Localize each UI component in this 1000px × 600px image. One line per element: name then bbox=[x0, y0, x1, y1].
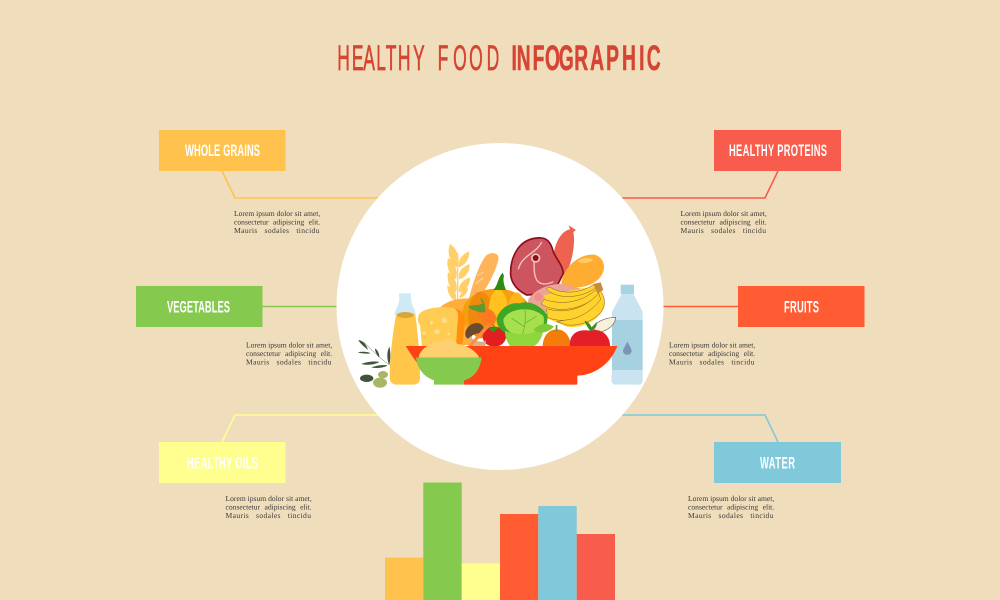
text block: vegetables bbox=[246, 340, 332, 366]
label: vegetables: VEGETABLES bbox=[167, 298, 230, 316]
icon: orange plate bbox=[406, 346, 617, 385]
icon: green bowl with mash bbox=[416, 339, 482, 385]
label: healthy oils: HEALTHY OILS bbox=[187, 454, 258, 472]
text block: fruits: consectetur adipiscing elit. bbox=[669, 349, 755, 358]
text block: healthy proteins: Lorem ipsum dolor sit amet, bbox=[680, 209, 767, 218]
icon: mango bbox=[561, 255, 604, 287]
label: healthy proteins bbox=[714, 130, 841, 171]
text block: healthy oils: consectetur adipiscing elit. bbox=[226, 502, 312, 512]
text block: fruits: Lorem ipsum dolor sit amet, bbox=[669, 340, 755, 350]
title: HEALTHY FOOD bbox=[337, 38, 499, 78]
text block: healthy proteins: Mauris sodales tincidu bbox=[680, 226, 766, 235]
text block: healthy oils: Mauris sodales tincidu bbox=[226, 511, 311, 520]
label: water bbox=[714, 442, 841, 483]
icon: carrot root bbox=[468, 323, 491, 347]
text block: whole grains: Mauris sodales tincidu bbox=[234, 226, 320, 235]
icon: wheat bbox=[447, 244, 470, 301]
icon: orange bbox=[543, 325, 571, 347]
text block: water: Mauris sodales tincidu bbox=[688, 511, 774, 520]
text block: whole grains bbox=[234, 209, 320, 235]
text block: fruits bbox=[669, 340, 755, 366]
label: vegetables bbox=[136, 286, 262, 327]
text block: fruits: Mauris sodales tincidu bbox=[669, 358, 755, 366]
text block: healthy oils: Lorem ipsum dolor sit amet, bbox=[226, 494, 312, 503]
text block: healthy proteins: consectetur adipiscing elit. bbox=[680, 218, 767, 226]
icon: sausage bbox=[553, 225, 576, 277]
text block: vegetables: consectetur adipiscing elit. bbox=[246, 349, 332, 358]
connector: water bbox=[618, 415, 778, 442]
connector: healthy oils bbox=[222, 415, 382, 442]
label: healthy oils bbox=[159, 442, 286, 483]
text block: vegetables: Lorem ipsum dolor sit amet, bbox=[246, 340, 332, 350]
text block: water: Lorem ipsum dolor sit amet, bbox=[688, 494, 774, 503]
connector: healthy proteins bbox=[618, 171, 778, 198]
icon: ham bbox=[528, 284, 592, 313]
icon: pumpkin bbox=[462, 273, 531, 339]
title: INFOGRAPHIC bbox=[512, 38, 661, 77]
text block: water: consectetur adipiscing elit. bbox=[688, 502, 774, 512]
icon: carrot bbox=[468, 297, 497, 328]
text block: healthy oils bbox=[226, 494, 312, 520]
icon: bananas bbox=[541, 282, 605, 327]
icon: juice bottle bbox=[390, 293, 420, 385]
icon: cabbage bbox=[497, 302, 554, 346]
icon: baguette bbox=[469, 253, 499, 299]
connector: vegetables bbox=[262, 306, 340, 308]
icon: apple bbox=[570, 321, 610, 347]
icon: orange bread back bbox=[440, 298, 473, 345]
icon: olives bbox=[360, 371, 388, 388]
text block: whole grains: Lorem ipsum dolor sit amet, bbox=[234, 209, 320, 218]
text block: water bbox=[688, 494, 774, 520]
text block: vegetables: Mauris sodales tincidu bbox=[246, 358, 332, 366]
icon: tomato left bbox=[483, 324, 506, 347]
icon: garlic bbox=[592, 317, 616, 333]
label: water: WATER bbox=[760, 454, 795, 472]
icon: olive branch bbox=[358, 340, 390, 368]
label: fruits: FRUITS bbox=[784, 298, 819, 316]
label: healthy proteins: HEALTHY PROTEINS bbox=[729, 141, 827, 160]
bar chart bbox=[385, 482, 615, 600]
icon: steak bbox=[511, 238, 563, 295]
text block: whole grains: consectetur adipiscing elit. bbox=[234, 218, 320, 226]
icon: water bottle bbox=[611, 285, 643, 385]
food illustration bbox=[358, 225, 643, 388]
label: fruits bbox=[738, 286, 864, 327]
connector: whole grains bbox=[222, 171, 382, 198]
label: whole grains bbox=[159, 130, 286, 171]
central white circle bbox=[336, 143, 664, 470]
title bbox=[337, 38, 661, 78]
icon: bread loaf bbox=[418, 307, 465, 346]
connector: fruits bbox=[660, 306, 738, 308]
icon: mushroom bbox=[465, 323, 486, 347]
label: whole grains: WHOLE GRAINS bbox=[185, 141, 260, 160]
text block: healthy proteins bbox=[680, 209, 767, 235]
